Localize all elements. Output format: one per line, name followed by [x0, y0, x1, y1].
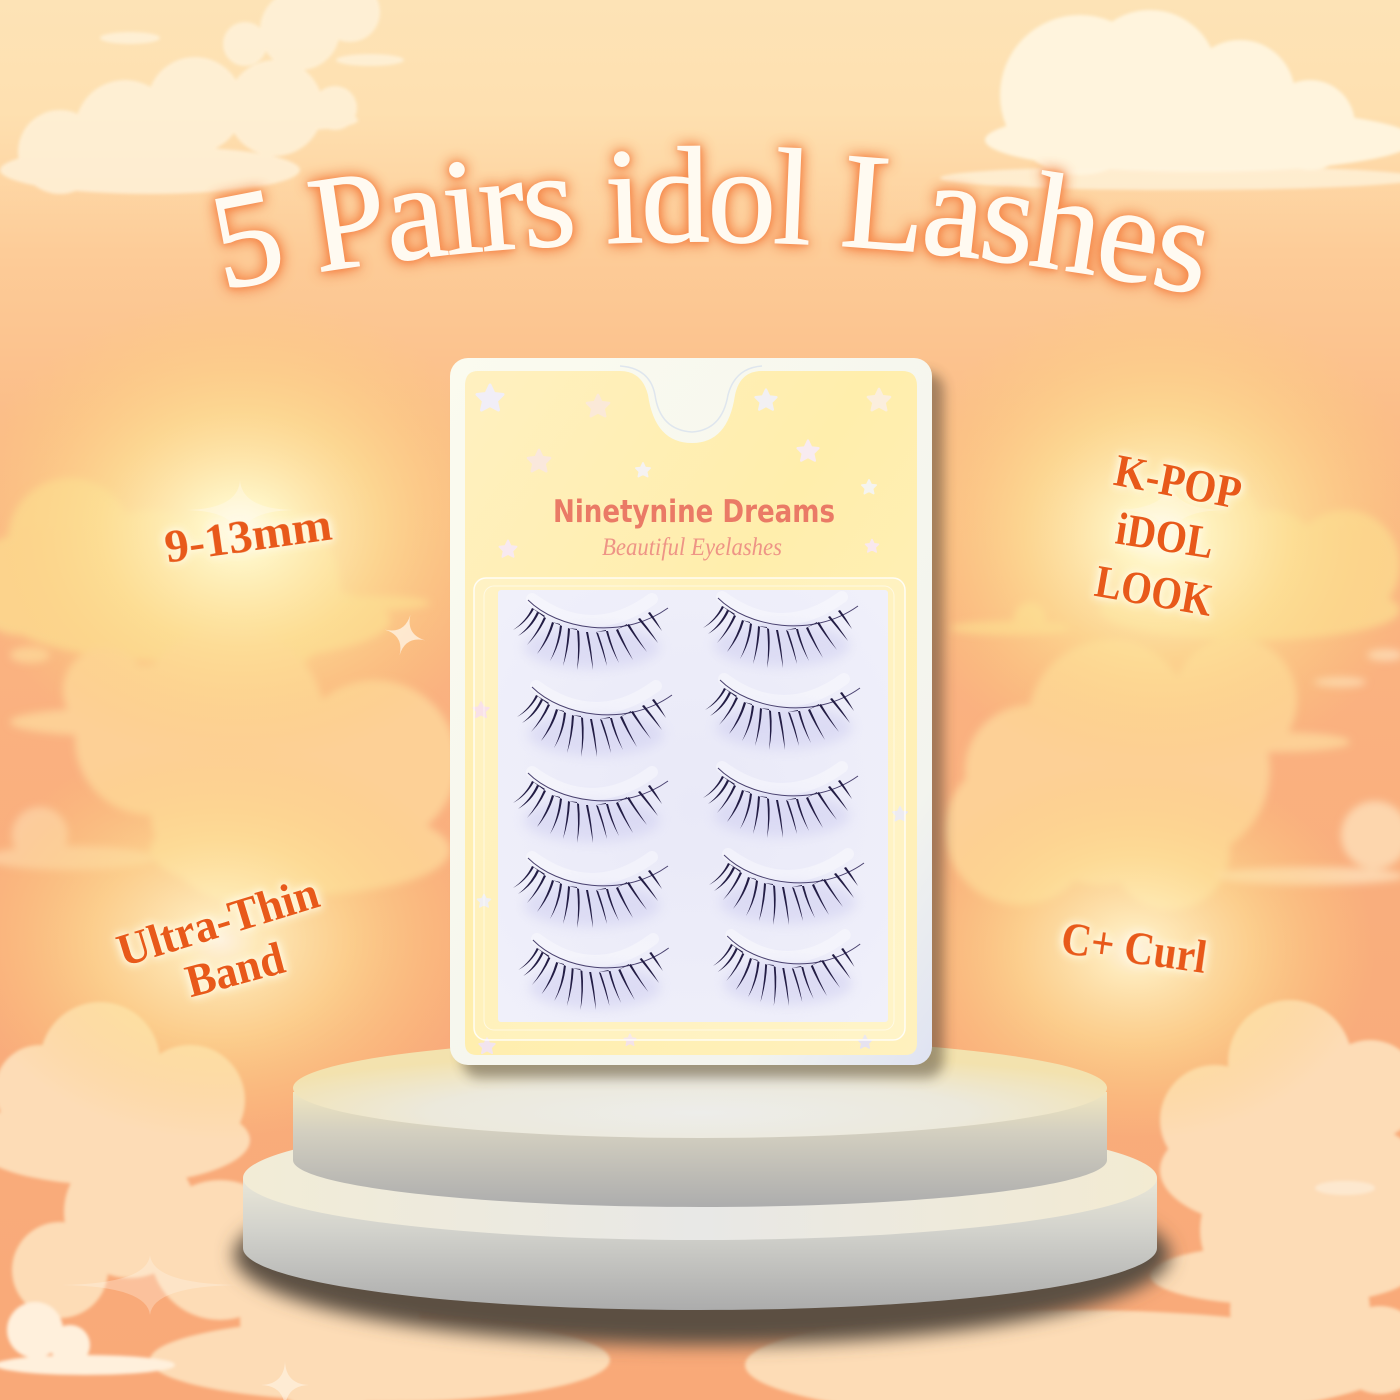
tray edge highlight: [484, 586, 894, 1030]
feature labels: [111, 444, 1246, 1007]
glow behind K-POP: [890, 295, 1400, 775]
brand name: Ninetynine Dreams: [553, 494, 835, 530]
lashes: left row 3: [513, 772, 668, 843]
lashes: right row 4: [709, 854, 864, 925]
clouds: top left group: [0, 0, 404, 194]
lashes: right row 2: [705, 679, 860, 750]
label: K-POP iDOL LOOK: [1091, 444, 1246, 626]
clouds: right middle group: [945, 465, 1400, 910]
sparkles: [60, 480, 1224, 1400]
lashes: right row 1: [703, 597, 858, 668]
lashes: left row 1: [513, 599, 668, 670]
card shadow: [462, 372, 944, 1078]
card plastic shell: [450, 358, 932, 1065]
brand tagline: Beautiful Eyelashes: [602, 534, 782, 561]
label: Ultra-Thin Band: Band: [180, 932, 290, 1007]
yellow backing with notch: [465, 371, 917, 1055]
clouds: left middle group: [0, 478, 457, 905]
notch inner outline: [620, 366, 762, 432]
lower pedestal tier: [243, 1116, 1157, 1310]
lashes: left row 2: [517, 686, 672, 757]
upper pedestal tier: [293, 1038, 1107, 1207]
label: Ultra-Thin Band: Ultra-Thin: [111, 867, 325, 976]
pedestal shadow: [234, 1165, 1170, 1345]
glow behind 9-13mm: [0, 295, 520, 765]
label: K-POP iDOL LOOK: iDOL: [1113, 503, 1217, 568]
label: C+ Curl: C+ Curl: [1058, 912, 1210, 984]
lash product card: [450, 358, 932, 1065]
clouds: bottom left group: [0, 1002, 610, 1400]
clouds: top right group: [940, 10, 1400, 190]
clouds: bottom right group: [745, 1000, 1400, 1400]
lashes: left row 5: [518, 939, 669, 1010]
title: 5 Pairs idol Lashes: [206, 134, 1214, 303]
glow behind Ultra-Thin: [0, 740, 480, 1140]
glow behind C+ Curl: [895, 760, 1375, 1140]
lashes: right row 5: [713, 935, 860, 1006]
label: K-POP iDOL LOOK: LOOK: [1091, 555, 1217, 626]
star decorations: [473, 385, 907, 1053]
clear tray: [474, 578, 905, 1040]
label: 9-13mm: 9-13mm: [161, 499, 335, 573]
lashes: right row 3: [703, 767, 858, 838]
lashes: left row 4: [513, 857, 668, 928]
label: K-POP iDOL LOOK: K-POP: [1110, 444, 1246, 519]
lash backing panel: [498, 590, 888, 1022]
